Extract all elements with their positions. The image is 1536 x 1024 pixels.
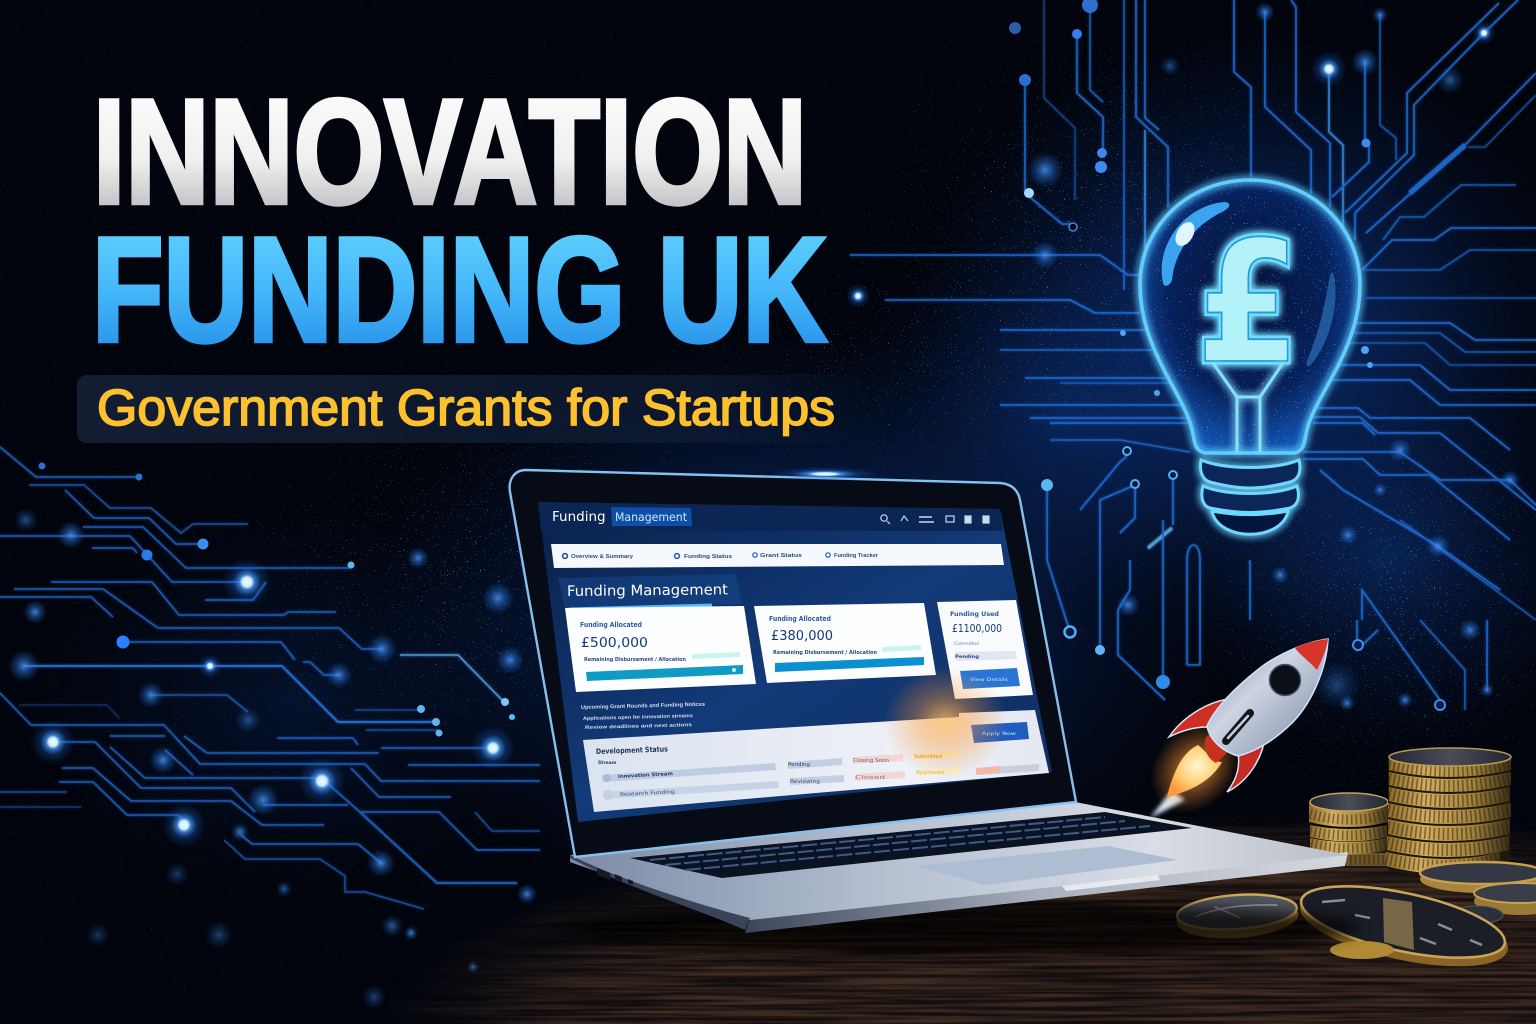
laptop shadow [560, 902, 1360, 954]
header bar [538, 502, 1003, 531]
funding card 2: Remaining Disbursement / Allocation [773, 650, 877, 656]
funding card 2: £380,000 [771, 628, 833, 644]
icon: glowing light bulb with pound sign [1140, 180, 1360, 534]
right flat coins [1420, 862, 1536, 915]
funding card 2: Funding Allocated [769, 615, 831, 623]
laptop [510, 467, 1360, 954]
navigation strip [551, 544, 1004, 568]
screen description: Review deadlines and next actions [585, 722, 692, 731]
flat coin left [1175, 891, 1300, 942]
rocket window [1270, 664, 1300, 696]
screen heading: Funding Management [567, 582, 728, 600]
coins [1175, 748, 1536, 981]
laptop lid and bezel [510, 470, 1076, 857]
laptop base [570, 802, 1348, 933]
circuit traces left [0, 447, 540, 909]
small coin stack [1309, 793, 1388, 866]
wooden table [410, 822, 1536, 1024]
title line 1: INNOVATION [93, 68, 807, 235]
header badge: Management [615, 510, 687, 524]
keyboard [630, 812, 1192, 878]
bulb screw base [1200, 460, 1300, 534]
funding card 3: View Details [970, 677, 1008, 682]
funding card 3: Committed [954, 641, 979, 647]
title [92, 68, 827, 373]
funding card 1: Funding Allocated [580, 621, 642, 629]
funding card 3: Funding Used [950, 610, 999, 618]
header badge [611, 507, 692, 526]
screen description: Upcoming Grant Rounds and Funding Notices [581, 702, 705, 711]
funding card 2 [754, 603, 936, 683]
trackpad [915, 846, 1178, 885]
applications table: Stream [598, 760, 617, 766]
laptop screen [538, 502, 1052, 822]
pound sign: £ [1196, 205, 1300, 401]
subtitle text: Government Grants for Startups [97, 379, 835, 436]
large flat coin [1294, 872, 1514, 981]
screen heading [558, 574, 742, 609]
applications table [583, 710, 1049, 812]
funding card 1: £500,000 [581, 635, 648, 651]
applications table: Innovation Stream [618, 771, 673, 780]
table action button: Apply Now [982, 731, 1017, 736]
funding card 3 [937, 600, 1033, 699]
table action button [971, 722, 1029, 743]
circuit traces right [850, 0, 1536, 710]
header icons [881, 515, 989, 524]
applications table: Research Funding [620, 789, 675, 798]
applications table: Pending [788, 762, 810, 768]
pound sign: £ [1196, 205, 1300, 401]
screen orange glare [883, 667, 1007, 777]
funding card 1 [565, 606, 756, 692]
funding card 1: Remaining Disbursement / Allocation [584, 657, 686, 663]
side ports [597, 868, 633, 885]
screen description: Applications open for innovation streams [583, 713, 693, 722]
funding card 3: Pending [955, 654, 979, 660]
icon: rocket [1131, 639, 1328, 832]
applications table: Approved [916, 770, 944, 776]
title line 2: FUNDING UK [92, 206, 827, 373]
navigation strip: Overview & Summary [571, 554, 634, 560]
applications table: Reviewing [790, 779, 820, 785]
applications table: Submitted [914, 754, 942, 760]
front notch [1062, 875, 1160, 891]
screen description [581, 702, 705, 731]
top light flare [770, 467, 880, 481]
bulb filament [1213, 363, 1283, 452]
applications table: Development Status [596, 744, 668, 756]
applications table: Closed [855, 775, 885, 781]
funding card 3: £1100,000 [952, 622, 1002, 635]
subtitle banner [77, 375, 867, 443]
navigation strip: Funding Status [684, 554, 732, 560]
navigation strip: Funding Tracker [834, 553, 879, 559]
navigation strip: Grant Status [760, 553, 802, 559]
rocket flame [1131, 704, 1259, 832]
tall coin stack [1386, 748, 1511, 885]
header logo: Funding [552, 509, 606, 525]
applications table: Closing Soon [853, 758, 889, 764]
